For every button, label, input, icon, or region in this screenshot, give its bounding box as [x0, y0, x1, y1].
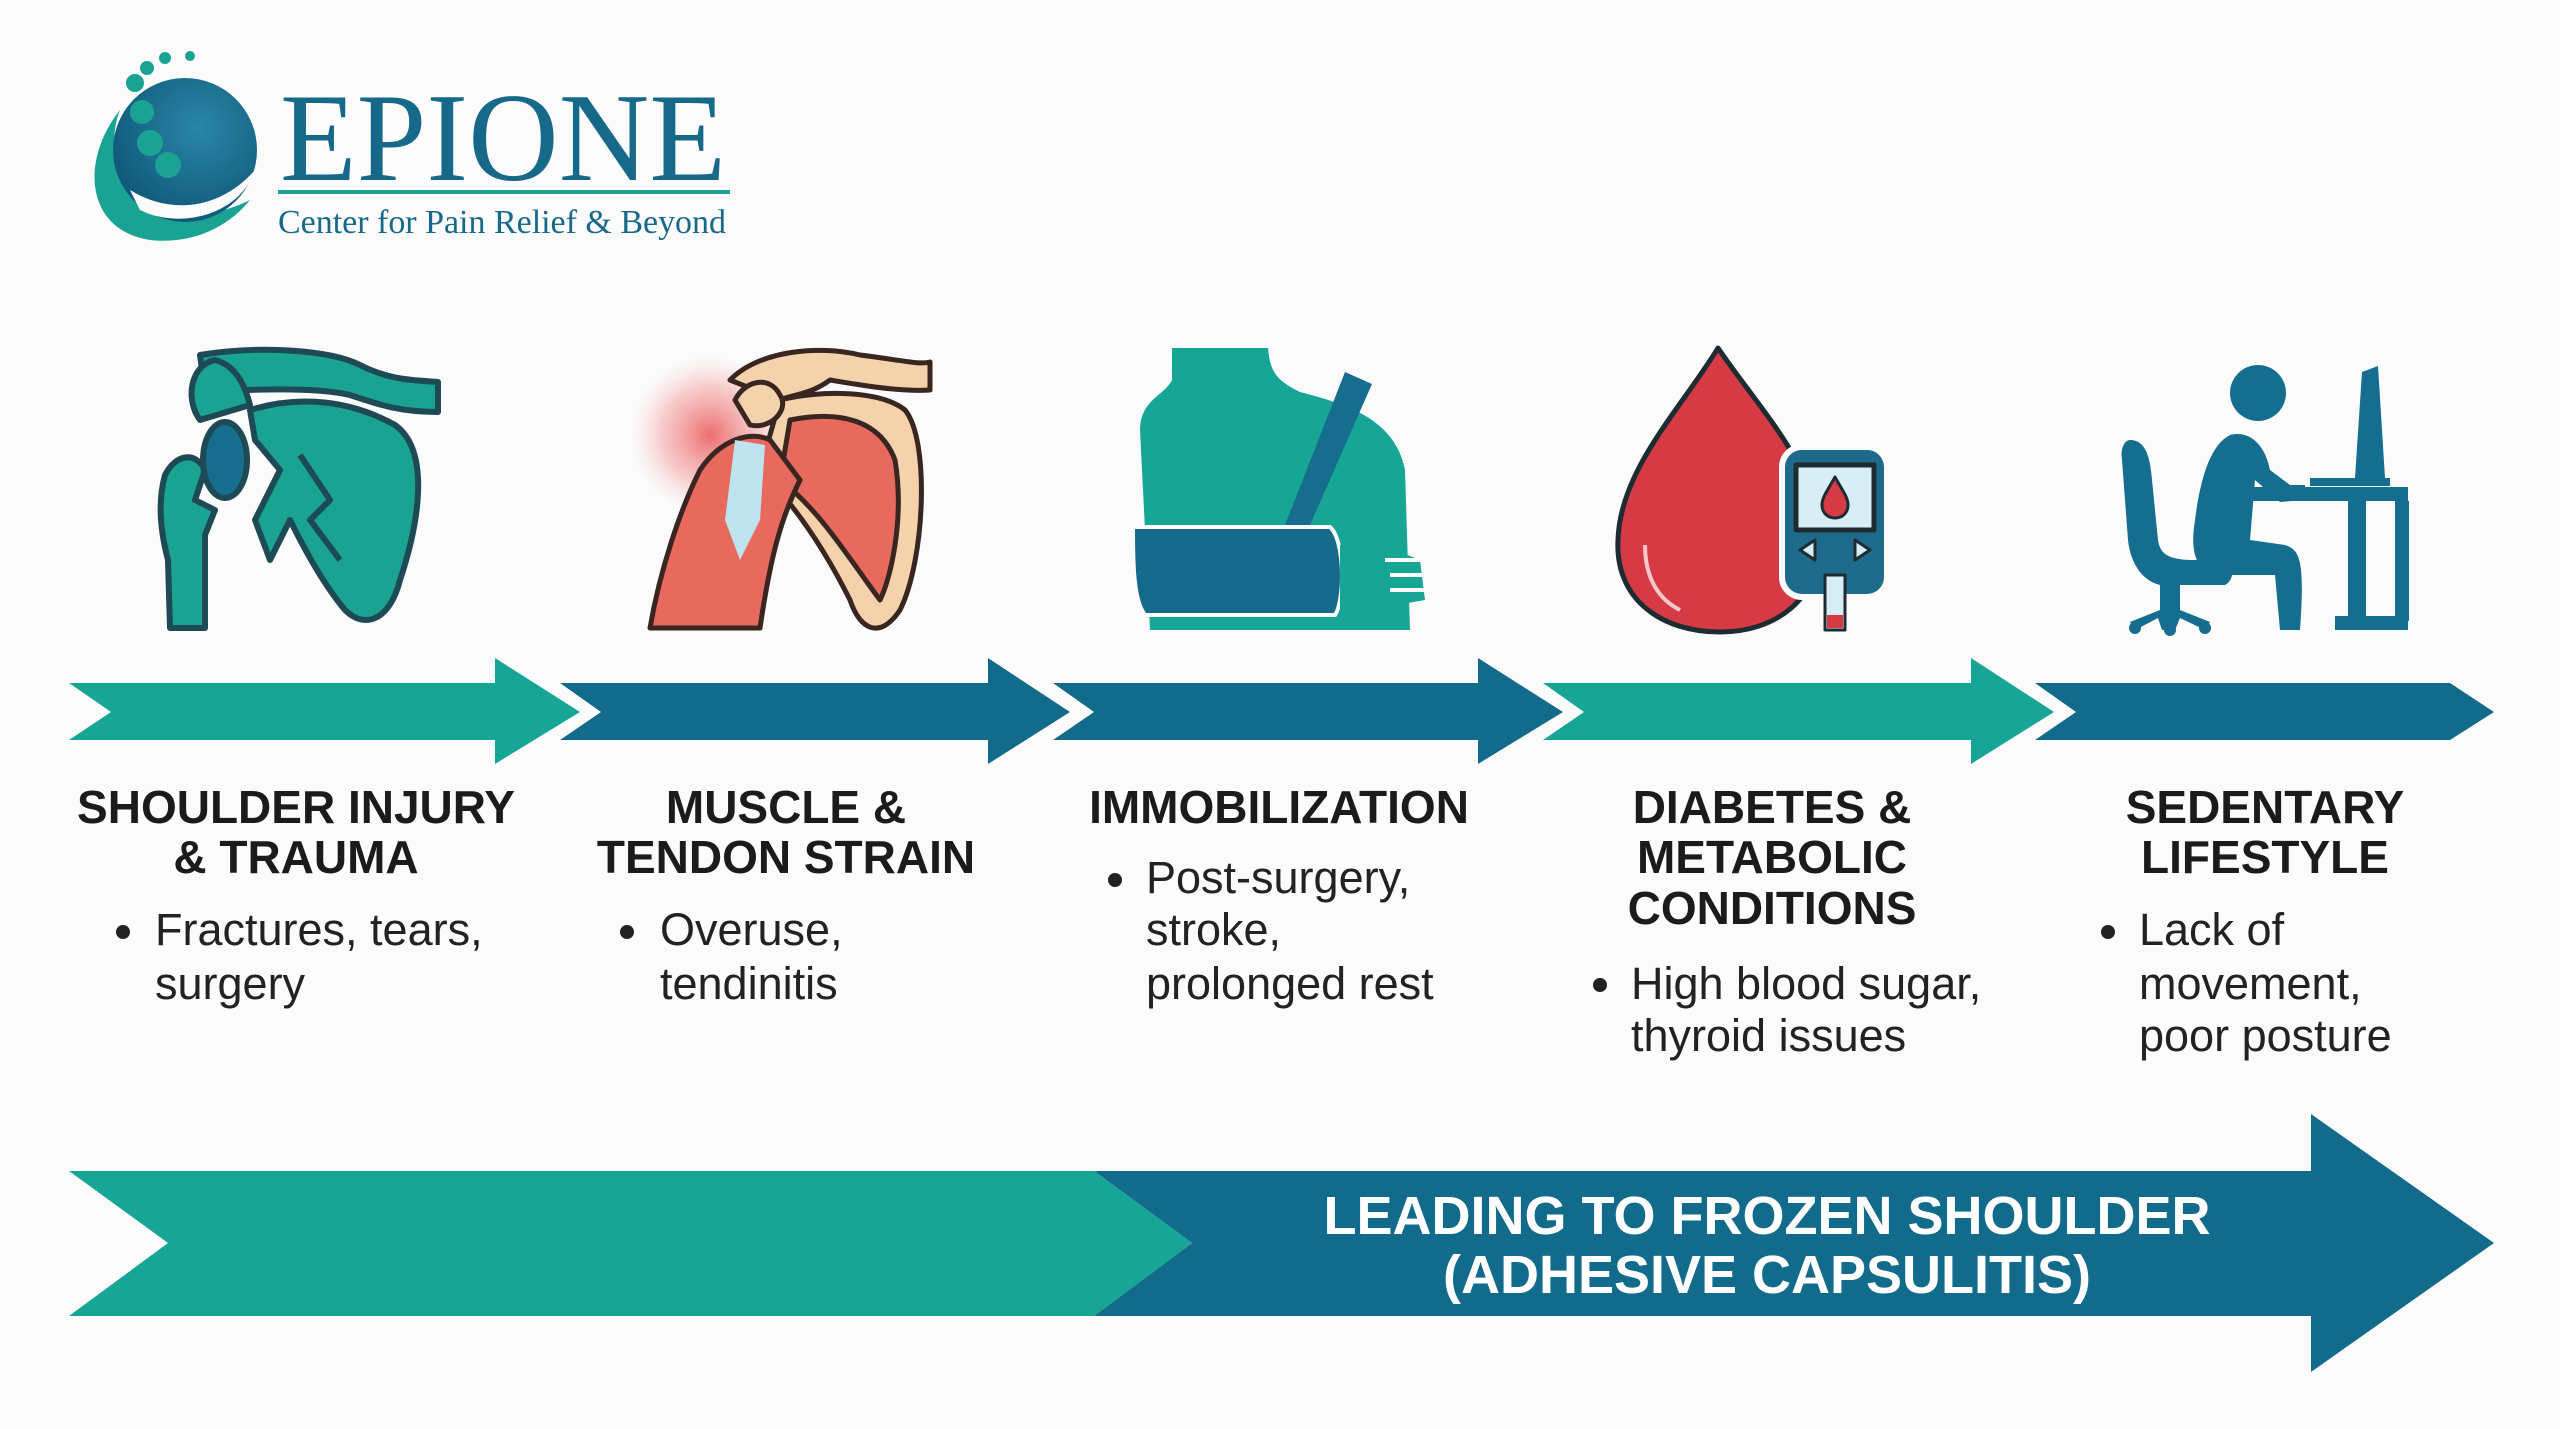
logo: Center for Pain Relief & Beyond: [278, 204, 726, 241]
bottom arrow: leading to frozen shoulder: LEADING TO FROZEN SHOULDER: [1323, 1186, 2211, 1246]
logo mark: [95, 51, 257, 241]
column 1 text: SHOULDER INJURY: [77, 781, 515, 833]
column 4 text: High blood sugar,: [1631, 958, 1981, 1009]
logo: [95, 51, 730, 241]
column 4 text: METABOLIC: [1637, 831, 1907, 883]
column 2 text: MUSCLE &: [666, 781, 906, 833]
column 3 text: Post-surgery,: [1146, 852, 1410, 903]
column 1 text: & TRAUMA: [173, 831, 419, 883]
column 2 text: tendinitis: [660, 958, 838, 1009]
column 1 text: [77, 781, 515, 1009]
icon: blood drop and glucose meter: [1618, 348, 1887, 632]
column 5 text: [2101, 781, 2404, 1061]
bottom arrow: leading to frozen shoulder: [69, 1114, 2494, 1372]
arrow 4: [1543, 658, 2054, 764]
column 4 text: [1593, 781, 1981, 1061]
arrow 1: [69, 658, 580, 764]
column 3 text: stroke,: [1146, 904, 1281, 955]
column 4 text: CONDITIONS: [1628, 882, 1916, 934]
icon: sedentary desk worker: [2122, 365, 2409, 636]
column 2 text: TENDON STRAIN: [597, 831, 975, 883]
column 2 text: Overuse,: [660, 904, 843, 955]
arrow 3: [1053, 658, 1563, 764]
bottom arrow: leading to frozen shoulder: (ADHESIVE CAPSULITIS): [1443, 1245, 2091, 1305]
column 5 text: Lack of: [2139, 904, 2285, 955]
column 5 text: SEDENTARY: [2126, 781, 2404, 833]
column 5 text: LIFESTYLE: [2141, 831, 2389, 883]
column 3 text: prolonged rest: [1146, 958, 1434, 1009]
icon: muscle and tendon strain: [630, 350, 930, 628]
arrow chain: [69, 658, 2494, 764]
column 3 text: [1089, 781, 1469, 1009]
column 1 text: Fractures, tears,: [155, 904, 483, 955]
column 2 text: [597, 781, 975, 1009]
column 5 text: movement,: [2139, 958, 2362, 1009]
logo text: EPIONE: [280, 69, 726, 208]
icon: fractured shoulder: [161, 350, 438, 628]
column 4 text: thyroid issues: [1631, 1010, 1906, 1061]
column 1 text: surgery: [155, 958, 306, 1009]
arrow 5: [2035, 683, 2494, 740]
icon: arm sling: [1133, 348, 1428, 630]
column 4 text: DIABETES &: [1633, 781, 1911, 833]
column 3 text: IMMOBILIZATION: [1089, 781, 1469, 833]
column 5 text: poor posture: [2139, 1010, 2392, 1061]
arrow 2: [560, 658, 1070, 764]
